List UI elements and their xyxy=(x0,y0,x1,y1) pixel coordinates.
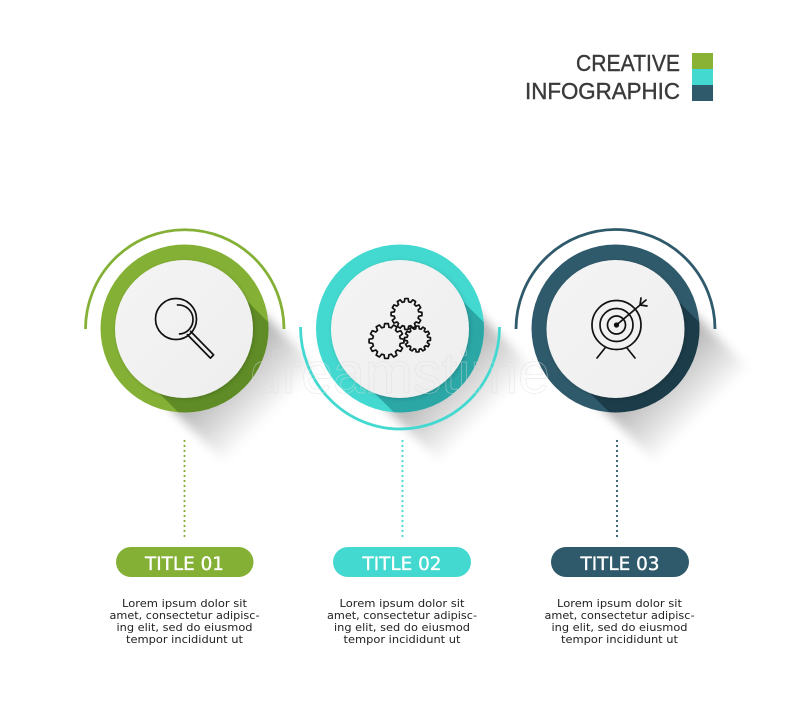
disc 1 xyxy=(115,260,253,398)
text block 2 xyxy=(327,597,477,646)
ring 2 xyxy=(316,244,484,412)
ring shadow 1 xyxy=(160,301,268,412)
ring shadow 2 xyxy=(374,302,484,412)
arc 2 xyxy=(300,327,500,429)
long shadow 3 xyxy=(569,282,752,465)
text block 1: amet, consectetur adipisc- xyxy=(110,609,260,622)
disc 2 xyxy=(331,260,469,398)
ring shadow 3 xyxy=(590,302,700,412)
watermark: dreamstime xyxy=(250,341,550,406)
icon: gears xyxy=(369,299,430,358)
panel: step 2 xyxy=(299,244,525,454)
legend swatches xyxy=(692,53,713,101)
long shadow 2 xyxy=(353,282,537,465)
text block 1: tempor incididunt ut xyxy=(126,633,244,646)
pill: title 01: TITLE 01 xyxy=(144,553,224,575)
disc 3 xyxy=(546,260,684,398)
arc 3 xyxy=(516,230,715,329)
text block 2: ing elit, sed do eiusmod xyxy=(334,621,470,634)
pill: title 02 xyxy=(333,547,471,577)
pill: title 02: TITLE 02 xyxy=(362,553,442,575)
pill: title 01 xyxy=(116,547,254,577)
arc 1 xyxy=(86,230,284,329)
title: CREATIVE xyxy=(576,50,680,76)
text block 3: tempor incididunt ut xyxy=(561,633,679,646)
text block 1: ing elit, sed do eiusmod xyxy=(116,621,252,634)
text block 2: tempor incididunt ut xyxy=(344,633,461,646)
title: INFOGRAPHIC xyxy=(525,78,680,104)
connector: dotted 2 xyxy=(401,441,404,538)
pill: title 03 xyxy=(551,547,689,577)
icon: target xyxy=(592,298,647,358)
ring 3 xyxy=(532,244,700,412)
text block 3: Lorem ipsum dolor sit xyxy=(557,597,683,610)
long shadow 1 xyxy=(138,282,321,465)
pill: title 03: TITLE 03 xyxy=(580,553,660,575)
text block 3 xyxy=(544,597,695,646)
text block 3: amet, consectetur adipisc- xyxy=(544,609,695,622)
title xyxy=(525,50,680,104)
text block 2: Lorem ipsum dolor sit xyxy=(340,597,465,610)
icon: magnifier xyxy=(156,298,214,358)
text block 2: amet, consectetur adipisc- xyxy=(327,609,477,622)
panel: step 3 xyxy=(514,228,740,454)
ring 1 xyxy=(100,244,268,412)
text block 1: Lorem ipsum dolor sit xyxy=(122,597,248,610)
connector: dotted 3 xyxy=(616,441,618,538)
text block 1 xyxy=(110,597,260,646)
connector: dotted 1 xyxy=(183,441,186,538)
panel: step 1 xyxy=(84,228,310,454)
text block 3: ing elit, sed do eiusmod xyxy=(552,621,688,634)
